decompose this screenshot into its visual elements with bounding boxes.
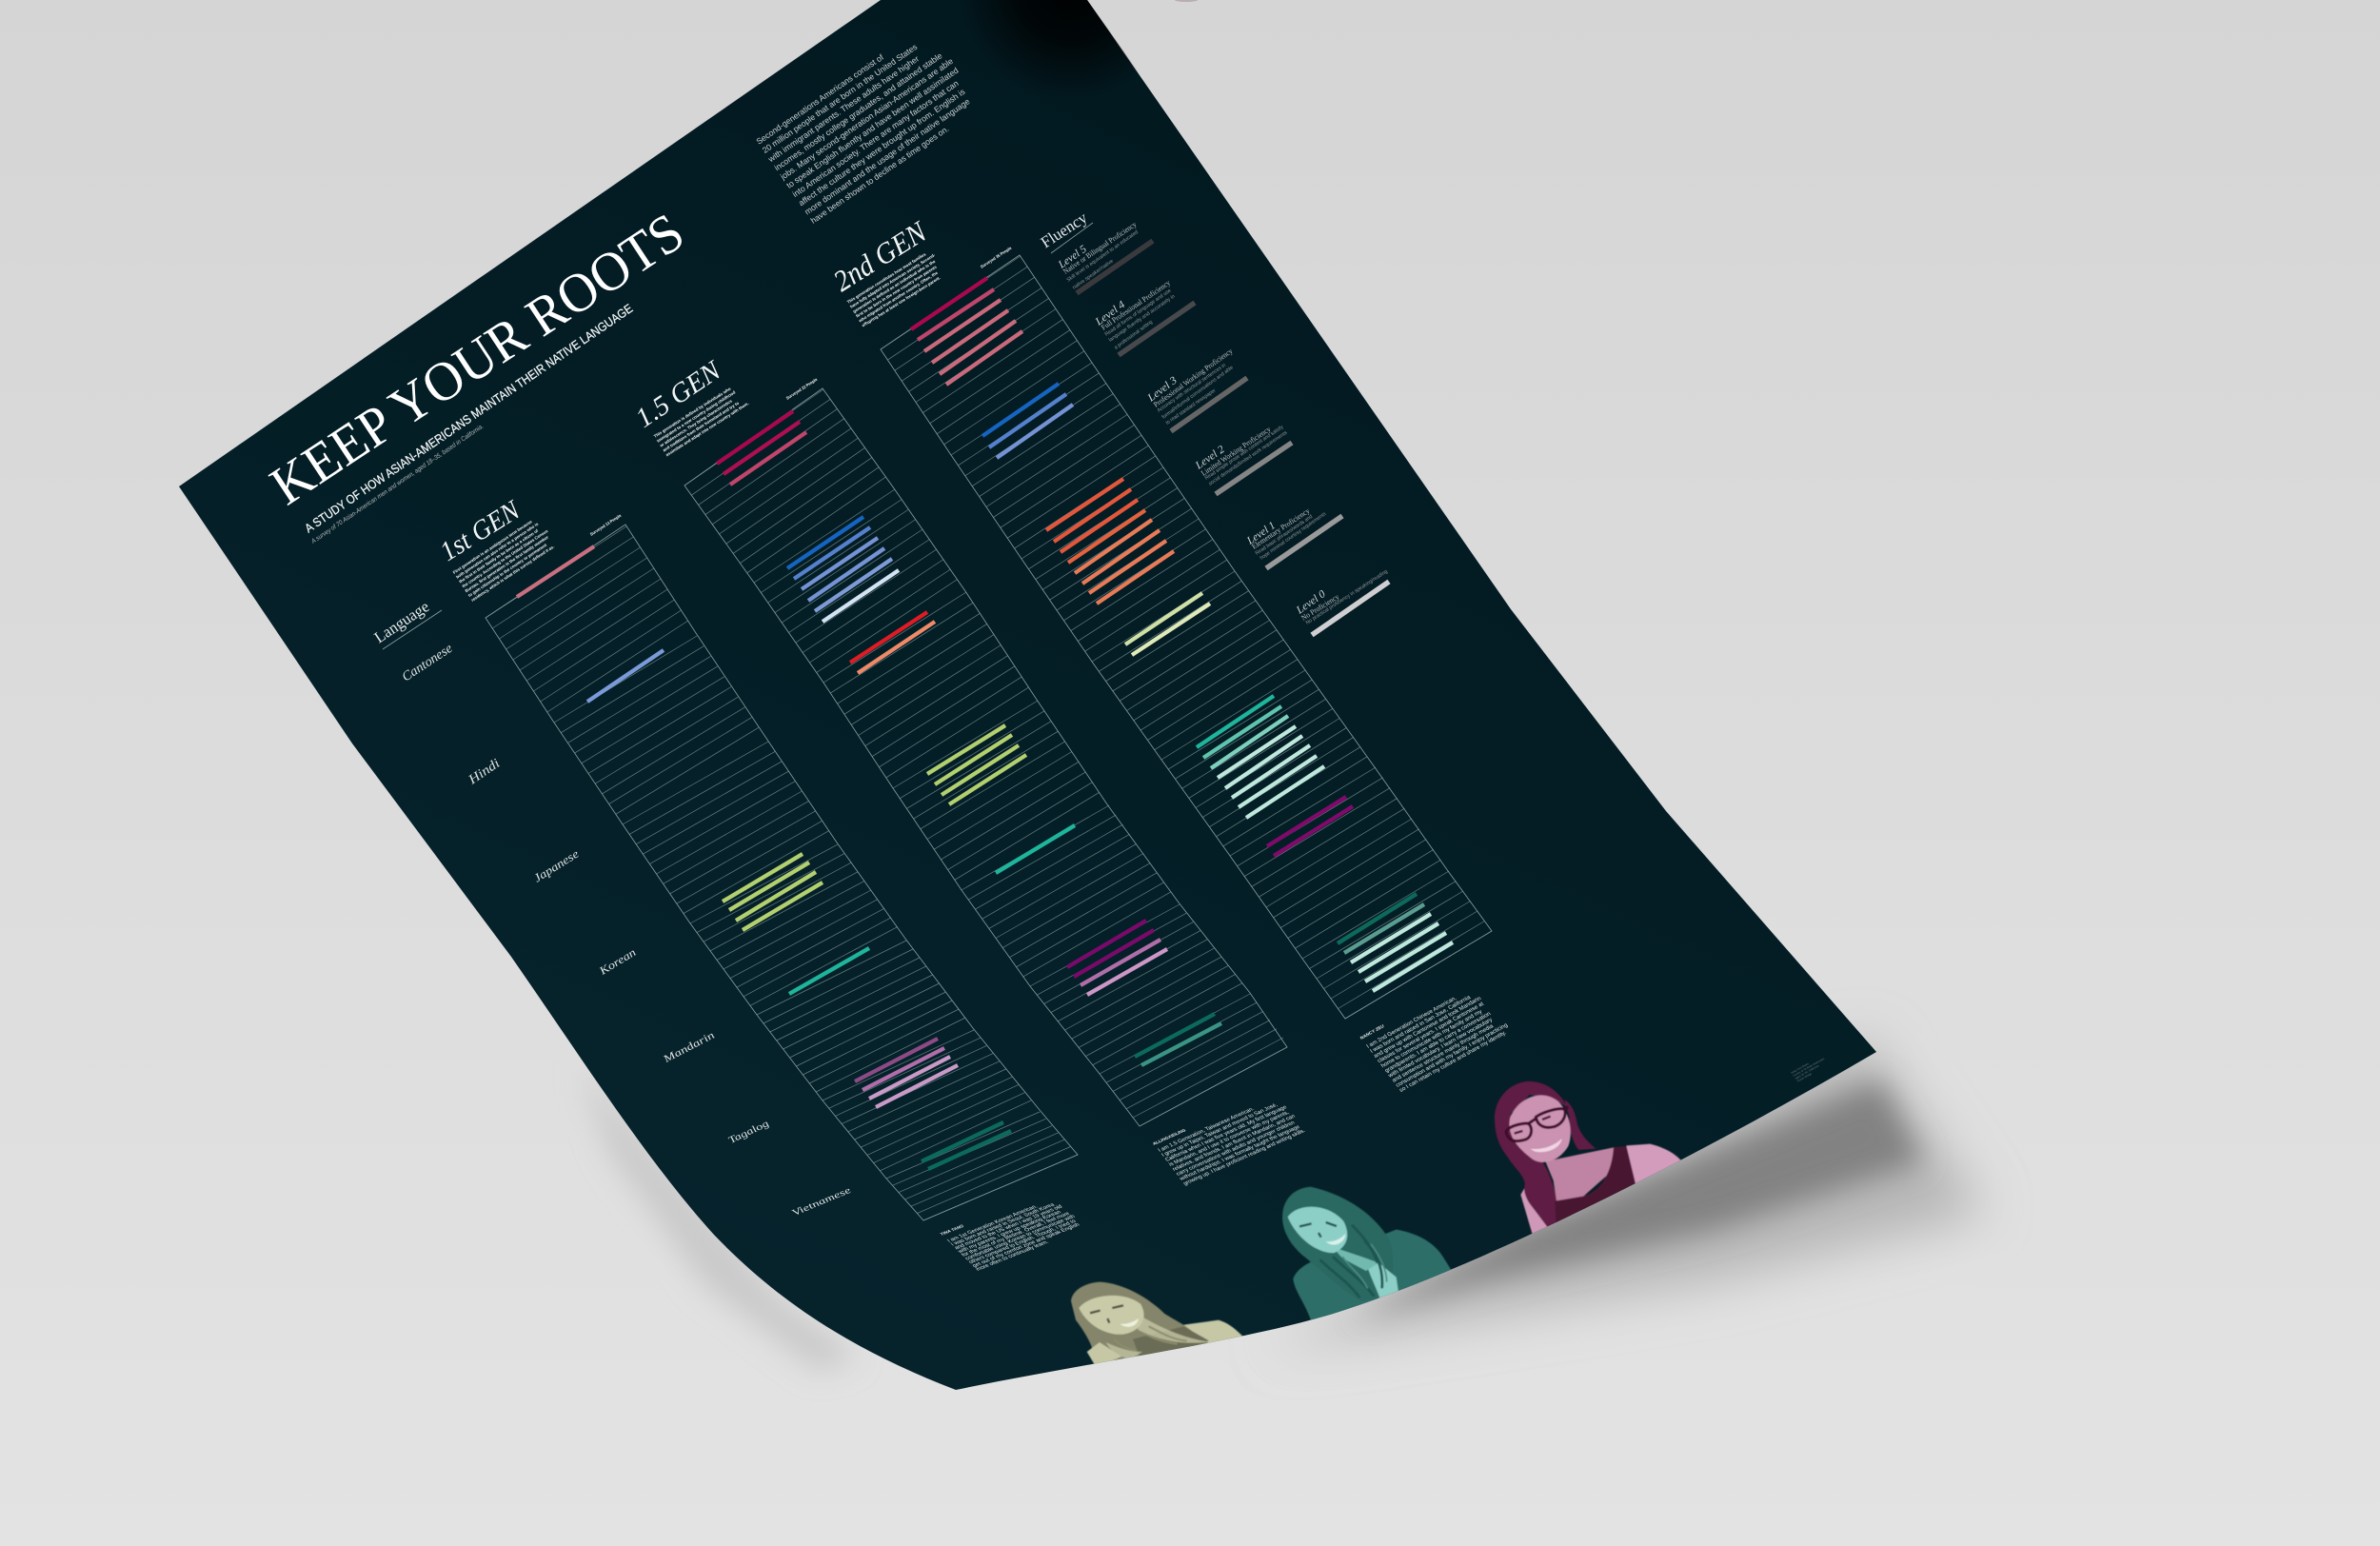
legend: level 5 [1056,220,1153,293]
title: KEEP YOUR ROOTS [259,201,695,517]
bars: Japanese, 2nd gen [1046,479,1174,604]
testimonial: Nancy Zeu: I am 2nd Generation Chinese American. [1366,996,1458,1050]
small mark at top edge [1175,0,1198,2]
language labels: Mandarin [660,1030,717,1065]
testimonial: Tina Tang: more often to continually learn. [975,1239,1051,1272]
heading: Fluency: Fluency [1038,208,1091,251]
bars: Cantonese, 2nd gen [911,278,1022,385]
testimonial: Nancy Zeu: with limited vocabulary. I learn new vocabulary [1387,1018,1494,1080]
poster sheet [179,0,1876,1390]
legend: level 3: Professional Working Proficiency [1152,347,1234,409]
bars: Vietnamese, 1.5 gen [1135,1014,1221,1065]
bars: Tagalog, 1st gen [855,1039,958,1107]
credits: aged 18–35, California [1795,1063,1820,1080]
legend: level 0: Level 0 [1294,588,1328,617]
legend: level 3: Level 3 [1145,375,1180,405]
language labels: Japanese [531,847,582,884]
testimonial: Tina Tang: TINA TANG [940,1223,965,1237]
language labels: Cantonese [400,642,455,684]
intro paragraph: jobs. Many second-generation Asian-Americans are able [778,56,955,182]
description: 2nd generation: offspring has at least one foreign-born parent. [861,275,942,327]
testimonial: Alling: carry conversations with adults and younger children [1176,1120,1297,1178]
survey count: 35 people: Surveyed 35 People [980,246,1013,269]
testimonial: Tina Tang: others compared to English. Though, I tried to [968,1219,1079,1265]
photo: woman with olive duotone [1071,1282,1244,1371]
legend: level 0: No Proficiency [1299,592,1340,623]
bars: Korean, 1st gen [723,854,823,930]
testimonial: Tina Tang: for the most of my lifetime. Overall, I feel more [961,1211,1072,1258]
legend: level 1: Read basic phrases/words and [1255,514,1314,557]
description: 1.5 generation: assimilate and adapt into new country with them. [664,401,749,457]
intro paragraph: incomes, mostly college graduates, and attained stable [772,50,944,172]
bars: Vietnamese, 2nd gen [1338,894,1453,991]
survey count: 22 people: Surveyed 22 People [785,377,819,401]
testimonial: Nancy Zeu [1359,983,1515,1094]
bars: Hindi, 2nd gen [982,384,1073,458]
panel: 1st generation [435,494,1078,1220]
intro paragraph: to speak English fluently and have been well assimilated [784,66,961,190]
legend: level 0: No practical proficiency in speaking/reading [1305,569,1389,626]
testimonial: Tina Tang [940,1196,1089,1273]
intro paragraph: 20 million people that are born in the United States [761,42,920,155]
chart grid: 1.5 generation [684,388,1287,1126]
testimonial: Alling: without hardships. I was formally taught the language [1178,1124,1301,1182]
legend: level 5: native speaker/native [1072,258,1115,291]
testimonial: Tina Tang: get out of my comfort zone and speak English [971,1222,1081,1269]
testimonial: Alling [1151,1094,1309,1187]
testimonial: Nancy Zeu: NANCY ZEU [1359,1023,1385,1041]
panel: fluency legend [1038,208,1389,635]
testimonial: Tina Tang: with my parents. I grew up speaking Korean [956,1210,1062,1255]
legend: level 4: Read all forms of language and use [1104,288,1172,338]
language column [371,597,854,1218]
testimonial: Alling: I am 1.5 Generation, Taiwanese American. [1158,1106,1256,1154]
testimonial: Alling: ALLINGXIDLING [1151,1128,1187,1146]
legend: level 1: hope minimal courtesy requirements [1259,511,1327,562]
description: 1st generation: both generation can also refer to a person who is [455,522,540,580]
testimonial: Nancy Zeu: home to communicate with my family and my [1380,1009,1483,1069]
language labels: Korean [596,946,639,978]
testimonial: Tina Tang: I was born and raised in Seoul, South Korea [950,1202,1057,1247]
bars: Tagalog, 2nd gen [1267,797,1353,856]
bars: Mandarin, 1st gen [789,948,869,994]
legend: level 4: language fluently and accurately in [1108,294,1176,344]
testimonial: Tina Tang: and moved to the US when I was 19 years old [954,1204,1064,1251]
description: 2nd generation: who migrated from another country. Often, the [857,270,939,324]
survey count: 13 people: Surveyed 13 People [589,513,623,537]
chart grid: 1st generation [486,525,1078,1220]
description: 1.5 generation: This generation is defined by individuals who [653,386,732,439]
description: 2nd generation: first to be born in the new country from parents [855,265,938,319]
testimonial: Alling: relatives, and friends. I am fluent in Mandarin, and can [1172,1114,1297,1173]
bars: Vietnamese, 1st gen [922,1122,1011,1169]
drop shadow beneath the curled sheet [581,1038,1985,1371]
testimonial: Nancy Zeu: classes for several years. I speak Cantonese at [1377,1001,1485,1064]
intro paragraph: have been shown to decline as time goes on. [809,124,951,226]
description: 1.5 generation: and traditions from their homeland and try to [662,401,740,453]
legend: level 3: to read standard newspaper [1165,388,1217,426]
legend: level 2: Level 2 [1193,444,1227,472]
panel: 1.5 generation [630,354,1287,1126]
description: 1st generation: residency, which is what this survey defined it as. [470,544,555,603]
legend: level 2: Limited Working Proficiency [1200,425,1272,478]
legend: level 5: Level 5 [1056,244,1089,271]
language labels [400,642,854,1218]
photo: woman with magenta duotone and glasses [1495,1081,1685,1240]
description: 2nd generation: generation is defined as an individual who is the [852,259,937,314]
testimonial: Nancy Zeu: so I can retain my culture and share my identity. [1398,1030,1508,1094]
testimonial: Alling: is Mandarin, and I use it to converse with my parents, [1168,1110,1291,1168]
description: 2nd generation: have fully adapted into American society. Second- [849,252,937,309]
legend: level 1: Level 1 [1244,520,1278,547]
testimonial: Alling: growing up. I have proficient reading and writing skills. [1182,1128,1307,1187]
panel: 2nd generation [827,214,1492,1019]
intro paragraph: Second-generations Americans consist of [754,52,885,147]
legend: level 4: Full Professional Proficiency [1100,278,1172,332]
bars: Korean, 2nd gen [1125,593,1210,655]
photo: woman with teal duotone [1282,1187,1453,1323]
bars: Korean, 1.5 gen [927,725,1026,804]
testimonial: Alling: California when I was five years old. My first language [1164,1105,1288,1163]
legend: level 4 [1093,278,1195,355]
description: 1.5 generation: or adolescence. They bring characteristics [659,398,733,448]
heading: Language: Language [371,597,432,646]
credits: Poster design [1796,1072,1813,1082]
bars: Mandarin, 1.5 gen [996,825,1075,873]
description: 1st generation: First generation is an ambiguous term because [452,519,533,575]
legend: level 1 [1244,506,1342,568]
subtitle: A STUDY OF HOW ASIAN-AMERICANS MAINTAIN THEIR NATIVE LANGUAGE [302,301,636,535]
dark fold at top of sheet [914,0,1161,105]
bars: Japanese, 1.5 gen [850,612,935,673]
legend: level 1: Elementary Proficiency [1250,506,1311,551]
testimonial: Nancy Zeu: and grew up with Cantonese and took Mandarin [1373,996,1482,1060]
legend: level 5: Native or Bilingual Proficiency [1061,220,1138,276]
language labels: Tagalog [725,1119,771,1145]
heading: 1st GEN: 1st GEN [435,494,526,567]
bars: Hindi, 1st gen [587,650,664,702]
credits: Keep Your Roots [1790,1061,1810,1075]
survey note: A survey of 70 Asian-American men and women, aged 18–35, based in California. [309,424,485,545]
testimonial: Tina Tang: I am 1st Generation Korean American. [946,1204,1040,1243]
description: 1st generation: to gain citizenship in the country or permanent [467,543,548,598]
bars: Tagalog, 1.5 gen [1067,921,1167,995]
testimonial: Tina Tang: comfortable using Korean to communicate with [964,1215,1077,1261]
credits: Survey of 70 Asian-Americans [1792,1057,1826,1078]
description: 1st generation: Bureau, first generation is the first family member [465,534,549,593]
testimonial: Alling: I grew up in Taipei, Taiwan and moved to San José, [1160,1102,1279,1159]
legend: level 3 [1145,347,1247,431]
heading: 1.5 GEN: 1.5 GEN [630,354,727,434]
intro paragraph: affect the culture they were brought up from. English is [797,87,967,208]
legend: level 2: Read simple prose with content and satisfy [1204,425,1285,482]
bars: Cantonese, 1.5 gen [717,411,806,485]
legend: level 3: Accuracy with structural sentences in [1157,363,1227,414]
testimonial: Nancy Zeu: and sentence structure mainly through media [1391,1023,1496,1083]
testimonial: Nancy Zeu: consumption and with my family. I enjoy practicing [1395,1022,1509,1089]
bars: Mandarin, 2nd gen [1197,696,1324,818]
legend: level 4: Level 4 [1093,299,1127,328]
legend: level 2: social demands/limited work requirements [1208,430,1289,487]
legend: level 4: a professional setting [1114,320,1154,351]
bars: Cantonese, 1st gen [517,546,594,597]
description: 2nd generation: This generation constitutes how most families [846,251,927,305]
intro paragraph: into American society. There are many factors that can [791,78,961,199]
bars: Hindi, 1.5 gen [787,517,899,622]
photos clipped to the sheet [1071,1081,1685,1371]
intro paragraph: with immigrant parents. These adults have higher [765,53,921,165]
legend: level 3: formal/informal conversations and able [1161,365,1235,421]
intro paragraph: more dominant and the usage of their native language [803,96,972,216]
description: 1.5 generation: immigrated to a new country during childhood [656,389,737,444]
description: 1st generation: the country. According to the United States Census [461,528,549,588]
language labels: Vietnamese [789,1185,854,1218]
legend: level 5: Skill level is equivalent to an educated [1066,229,1140,284]
testimonial: Nancy Zeu: I was born and raised in San Jose, California [1369,995,1473,1055]
description: 1st generation: the first in their family to be born as a citizen of [458,528,540,585]
chart grid: 2nd generation [881,255,1492,1019]
heading: 2nd GEN: 2nd GEN [827,214,934,298]
testimonial: Nancy Zeu: grandparents. I am able to carry a conversation [1384,1011,1492,1074]
language labels: Hindi [466,757,503,788]
